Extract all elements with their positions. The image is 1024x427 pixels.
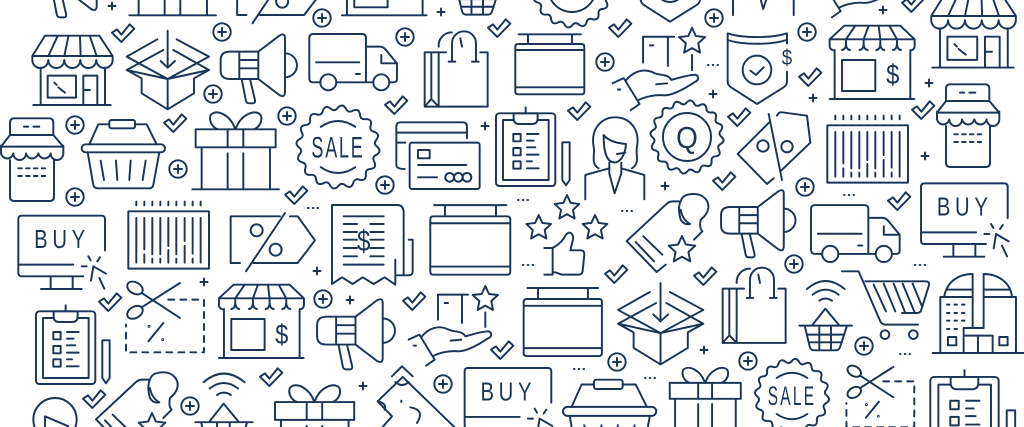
icon: sale badge: SALE <box>311 132 365 165</box>
icon: dollar store: $ <box>886 58 900 90</box>
icon: round clock bottom left <box>33 398 77 427</box>
icon: gift box lower left <box>272 385 358 427</box>
icon: open box <box>127 31 209 109</box>
icon: delivery truck <box>309 34 397 90</box>
icon: security shield: $ <box>782 47 793 70</box>
icon: shopping cart <box>842 271 929 339</box>
icon: monitor buy right <box>921 183 1009 257</box>
icon: double price tag <box>738 112 810 184</box>
icon: tag with star <box>627 194 708 272</box>
icon: delivery truck right <box>811 205 900 262</box>
checkmarks <box>83 0 934 408</box>
circled plus marks <box>66 9 873 415</box>
icon: woman top <box>733 0 794 15</box>
icon: dollar store top <box>342 0 427 15</box>
icon: mall building <box>933 274 1024 353</box>
icon: clipboard checklist left <box>36 305 110 384</box>
ellipsis dot marks <box>308 65 925 378</box>
icon: monitor buy bottom <box>465 368 552 427</box>
icon: shop sign lower <box>524 288 602 356</box>
icon: quality badge: Q <box>676 121 698 155</box>
icon: tag with star lower <box>96 372 178 427</box>
icon: quality badge <box>650 100 724 174</box>
icon: scissors and coupon <box>125 279 204 352</box>
icon: hand top right <box>815 0 904 17</box>
icon: storefront top right <box>931 0 1016 68</box>
icon: credit cards <box>396 122 480 189</box>
icon: receipt: $ <box>357 223 370 258</box>
icon: megaphone lower <box>317 299 395 369</box>
icon: hand with door and star <box>409 286 498 366</box>
icon: clipboard checklist <box>496 107 570 186</box>
icon: kiosk <box>1 118 63 201</box>
icon: sale badge <box>296 105 380 189</box>
icon: dollar store <box>830 26 915 99</box>
icon: percent tag top <box>237 0 321 23</box>
icon: monitor buy <box>18 216 106 289</box>
icon: megaphone top left <box>31 0 109 17</box>
icon: barcode left <box>128 202 209 269</box>
icon: gift box <box>192 112 279 189</box>
icon: basket <box>82 120 165 188</box>
icon: scissors and coupon right <box>846 363 914 427</box>
icon: gift box top <box>129 0 216 15</box>
icon: sale badge lower: SALE <box>768 381 816 411</box>
icon: security shield <box>728 33 793 104</box>
icon: dollar store lower <box>219 285 304 358</box>
icon: hand with door and star upper <box>613 28 705 110</box>
icon: shop sign centre <box>430 205 510 275</box>
icon: top badge <box>532 0 612 28</box>
icon: receipt <box>332 205 413 285</box>
icon: wifi basket <box>799 281 852 350</box>
icon: woman <box>585 117 644 199</box>
icon: shopping bag lower <box>723 268 786 343</box>
icon: shield top <box>641 0 700 22</box>
icon: kiosk right <box>937 84 999 167</box>
icon: sale badge lower <box>755 359 829 427</box>
icon: thumbs up with stars <box>526 195 607 275</box>
icon: shopping bag <box>425 31 488 107</box>
icon: monitor buy: BUY <box>34 225 90 254</box>
icon: basket lower <box>563 380 656 427</box>
icon: percent tag <box>231 213 315 271</box>
icon: open box lower <box>618 283 703 364</box>
icon: barcode <box>827 116 908 183</box>
icon: gift box lower right <box>667 368 744 427</box>
icon: banknote <box>378 366 455 427</box>
icon: shop sign <box>515 34 584 94</box>
icon: dollar store lower: $ <box>275 318 289 350</box>
icon: basket top <box>452 0 504 15</box>
small plus marks <box>108 2 932 390</box>
icon: storefront <box>32 36 113 105</box>
icon: wifi basket lower <box>195 374 253 427</box>
icon: monitor buy bottom: BUY <box>480 377 536 406</box>
icon: megaphone right <box>721 190 795 257</box>
icon: clipboard checklist bottom right <box>930 370 1015 427</box>
icon: megaphone <box>221 34 297 103</box>
icon: monitor buy right: BUY <box>937 192 993 221</box>
